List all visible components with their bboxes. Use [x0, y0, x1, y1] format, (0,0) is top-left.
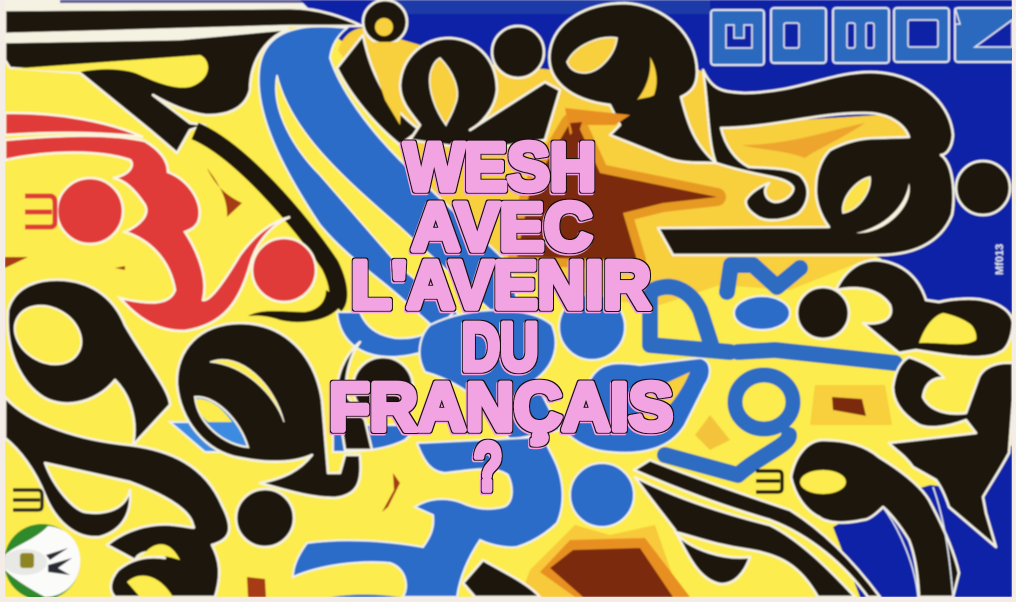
painting: black mark right — [756, 471, 782, 492]
painting: red disc left — [57, 178, 123, 244]
painting: blue script ring — [735, 375, 793, 429]
painting: black disc centre right — [797, 287, 849, 339]
painting: brown lower right quad — [832, 397, 866, 416]
painting: orange accent in gold — [565, 108, 630, 135]
tile 3 slot b — [866, 23, 874, 48]
painting: black ring upper right — [836, 260, 1013, 357]
title line 2: AVEC — [412, 189, 592, 265]
painting: pale top band — [5, 0, 308, 10]
logo white field — [5, 526, 80, 597]
title line 3: L'AVENIR — [351, 247, 651, 323]
painting: black horn — [337, 342, 372, 450]
painting: white arc lines on blue — [883, 487, 953, 597]
painting: brown notch — [570, 122, 582, 145]
painting: leaf eye in ring 2 — [567, 37, 617, 73]
painting: black stroke bottom upper — [634, 460, 880, 597]
logo gold shield — [20, 553, 34, 568]
tile 3 — [833, 8, 889, 63]
painting: blue leaf right — [560, 358, 710, 453]
tile 2 hole — [784, 23, 799, 48]
painting: orange halo — [517, 123, 717, 260]
painting: yellow eye of loop — [4, 294, 92, 376]
painting: blue disc right of DU — [559, 294, 625, 360]
painting: leaf eye in right ring — [843, 177, 870, 213]
painting: yellow part of ring eye — [196, 399, 232, 422]
painting: dark red marks left — [5, 168, 400, 597]
painting: red calligraphy body — [5, 136, 290, 331]
painting: yellow slit in blue swash — [276, 75, 490, 325]
logo white band — [3, 549, 47, 575]
painting: blue script tail — [665, 435, 789, 475]
painting: black tail — [248, 290, 344, 322]
painting: blue script bar — [738, 350, 895, 363]
painting: blue band under FRANCAIS — [333, 425, 420, 452]
logo black brush — [46, 548, 72, 575]
title line 6: ? — [474, 429, 502, 505]
painting: black C shape right — [889, 357, 1013, 547]
tile 1 hole — [726, 25, 752, 48]
painting: orange streak — [742, 123, 865, 158]
painting: pale blue bar — [166, 420, 220, 454]
painting: black nine lower right — [791, 440, 959, 597]
painting: crescent in right ring — [856, 183, 910, 233]
painting: black long stroke lower left — [5, 397, 229, 597]
painting: black stroke bottom centre — [463, 560, 540, 597]
painting: long thin black stroke — [195, 131, 338, 305]
tile 1 — [711, 10, 764, 65]
painting: large blue swash — [259, 26, 525, 342]
painting: lighter blue top band — [380, 0, 710, 14]
painting: GAMOZ style tile lettering — [711, 8, 1015, 65]
painting: black disc right — [956, 161, 1010, 215]
painting: black disc top — [492, 26, 544, 78]
painting: brown centre — [517, 123, 717, 260]
painting: black stroke bottom lower — [635, 477, 855, 597]
painting: eye of nine — [800, 470, 846, 494]
title line 5: FRANÇAIS — [329, 369, 673, 445]
logo green disc — [4, 524, 80, 600]
title — [329, 129, 673, 505]
tile 5 lower hole — [975, 20, 1012, 47]
painting: black ring 1 — [400, 38, 560, 150]
painting: red strip — [5, 113, 143, 137]
painting: top black bar — [5, 8, 362, 34]
painting: orange bottom halo — [540, 538, 690, 597]
title line 4: DU — [462, 309, 538, 385]
painting: black ring 2 with column — [549, 3, 716, 163]
painting: blue script blob — [734, 296, 790, 330]
painting: yellow eyes in lower stroke — [127, 544, 180, 597]
painting: red disc right — [252, 238, 316, 302]
painting: gold tongue in ring 2 — [637, 57, 657, 100]
tile 5 — [955, 8, 1015, 62]
painting: black disc lower — [236, 489, 294, 547]
painting: blue disc bottom — [570, 463, 634, 527]
painting: diagonal black stroke top — [337, 35, 420, 145]
painting: gold diamond — [695, 415, 730, 450]
painting: blue lower calligraphy — [293, 437, 563, 597]
painting: gold central field — [338, 28, 935, 305]
painting: white line between bars — [5, 26, 290, 42]
painting: red mark — [25, 196, 55, 227]
painting: blue script zigzag — [727, 265, 800, 292]
tile 4 hole — [908, 20, 938, 47]
painting: blue mass behind DU — [420, 310, 560, 440]
painting: gold quad around brown mark — [810, 385, 892, 425]
painting: blue lower right — [833, 445, 1012, 597]
painting: black ring centre left — [177, 323, 361, 498]
painting: black mark — [13, 490, 42, 510]
painting: blue sliver bottom — [330, 594, 400, 597]
painting: black loop upper left — [8, 280, 170, 445]
painting: leaf eye in ring 1 — [430, 58, 457, 125]
painting: second black bar and flag — [5, 29, 288, 153]
curl gold centre — [375, 18, 393, 36]
painting: signature: Mf013 — [994, 244, 1006, 275]
painting: big black stroke right — [658, 70, 954, 255]
painting: dark line at very top — [60, 0, 320, 3]
painting: ring eye — [195, 397, 248, 447]
tile 4 — [894, 8, 949, 62]
painting: black disc behind FRANCAIS — [353, 357, 413, 417]
painting: blue ring under centre — [337, 310, 470, 357]
tile 5 upper hole — [955, 8, 960, 24]
painting: yellow tongue — [10, 55, 208, 88]
painting: black curl top — [363, 0, 407, 44]
curl disc — [363, 0, 407, 44]
tile 3 slot a — [847, 23, 855, 48]
painting: yellow inside leaf — [643, 371, 691, 420]
painting: yellow hole upper right — [919, 313, 976, 344]
painting: gold lower zone near bottom — [525, 525, 671, 597]
painting: round logo — [3, 524, 80, 600]
painting: gold patch under curl — [366, 42, 425, 125]
painting: crescent slit in ring — [210, 360, 284, 422]
title line 1: WESH — [404, 129, 596, 205]
painting: blue sky upper right — [300, 0, 1012, 330]
tile 2 — [771, 8, 826, 63]
painting: blue script p — [650, 287, 730, 352]
painting: brown bottom patch — [550, 548, 673, 597]
